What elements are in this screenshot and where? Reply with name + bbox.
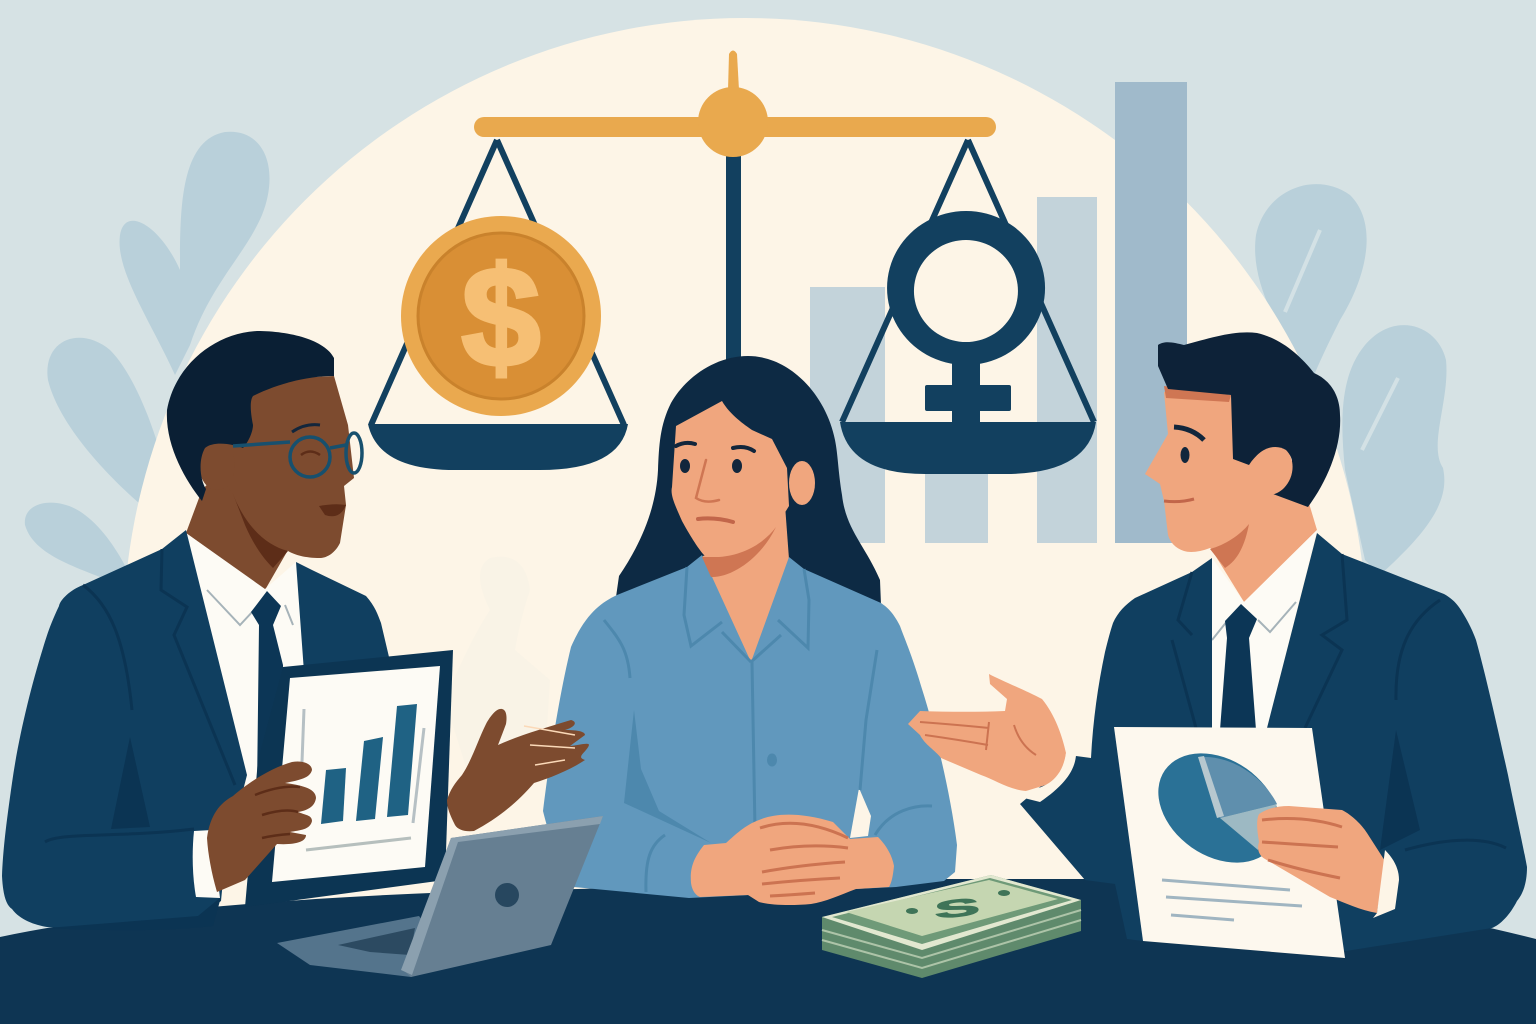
right man jacket lines [1172, 554, 1506, 850]
right man jacket shading [1380, 730, 1420, 850]
woman facial features [676, 443, 754, 522]
right man gesturing hand [908, 674, 1066, 791]
left man [2, 331, 389, 930]
coin: $ [462, 238, 540, 397]
female symbol [887, 211, 1045, 430]
laptop logo [495, 883, 519, 907]
left man jacket [2, 530, 247, 930]
woman gap between torso and arm [850, 788, 871, 838]
left man collar lines [207, 590, 293, 625]
money dollar sign: S [933, 892, 981, 924]
left man jacket shading [47, 737, 221, 930]
pie chart [1137, 731, 1301, 885]
document lines [1162, 880, 1302, 920]
left man hand on tablet [207, 762, 316, 892]
money stack side [822, 875, 1081, 978]
scale hub [698, 87, 768, 157]
left man hair [167, 331, 334, 501]
laptop base [277, 916, 451, 977]
background leaves left [25, 132, 270, 590]
woman shirt shading [624, 710, 711, 843]
table [0, 879, 1536, 1024]
woman ear [789, 461, 815, 505]
woman neck shadow [702, 527, 776, 577]
right man neck [1210, 480, 1317, 602]
right man tie [1220, 604, 1257, 730]
woman face [672, 401, 789, 557]
tablet screen [272, 666, 440, 882]
right man shirt [1212, 530, 1317, 728]
right man neck shadow [1210, 524, 1249, 568]
scale top spike [728, 50, 739, 90]
laptop keys [338, 928, 415, 955]
tablet bars [321, 704, 417, 824]
right pan [840, 422, 1096, 474]
left man jacket lines [45, 549, 235, 842]
left pan [368, 424, 628, 470]
right man facial features [1164, 427, 1204, 502]
left man head [215, 376, 354, 558]
woman neck [700, 505, 789, 664]
woman hair back [616, 356, 881, 605]
silhouette on wall [445, 557, 550, 780]
left man cuff [193, 830, 220, 898]
left man shirt [186, 533, 304, 800]
left strings [371, 140, 624, 425]
laptop edge [401, 816, 603, 975]
left man neck shadow [233, 494, 288, 568]
left man tie [251, 591, 283, 790]
right man cuff [1024, 753, 1076, 802]
woman center [543, 356, 957, 905]
left man gesturing hand [447, 709, 589, 831]
right man collar lines [1212, 602, 1296, 640]
document page [1114, 727, 1345, 958]
left man neck [186, 460, 320, 590]
right man hand on document [1257, 806, 1385, 913]
laptop lid [403, 816, 603, 977]
right man jacket [1020, 533, 1527, 951]
right man cuff near document [1373, 850, 1399, 918]
coin [401, 216, 601, 416]
tablet baseline [306, 838, 411, 850]
left man facial features [292, 425, 346, 516]
right man forehead band [1164, 386, 1231, 402]
left man right jacket side [296, 562, 389, 672]
woman shirt [543, 555, 957, 898]
bar chart in background [810, 82, 1187, 543]
right man head [1145, 392, 1313, 575]
background leaves right [1255, 184, 1446, 575]
right strings [842, 140, 1094, 422]
left man ear [199, 440, 235, 490]
cream arch [123, 18, 1367, 1024]
document with pie chart [1114, 727, 1345, 958]
balance scale [368, 50, 1096, 474]
stack of money [822, 875, 1081, 978]
right man ear [1250, 447, 1293, 495]
money top bill [822, 875, 1081, 950]
woman hands [691, 815, 894, 905]
woman shirt fold lines [604, 567, 932, 892]
tablet side lines [302, 709, 424, 823]
right man [908, 332, 1527, 951]
laptop [277, 816, 603, 977]
tablet frame [245, 650, 453, 907]
left man glasses [233, 433, 362, 477]
scale pole [726, 150, 741, 360]
tablet with bar chart [245, 650, 453, 907]
right man hair [1158, 332, 1340, 507]
scale beam [474, 117, 996, 137]
